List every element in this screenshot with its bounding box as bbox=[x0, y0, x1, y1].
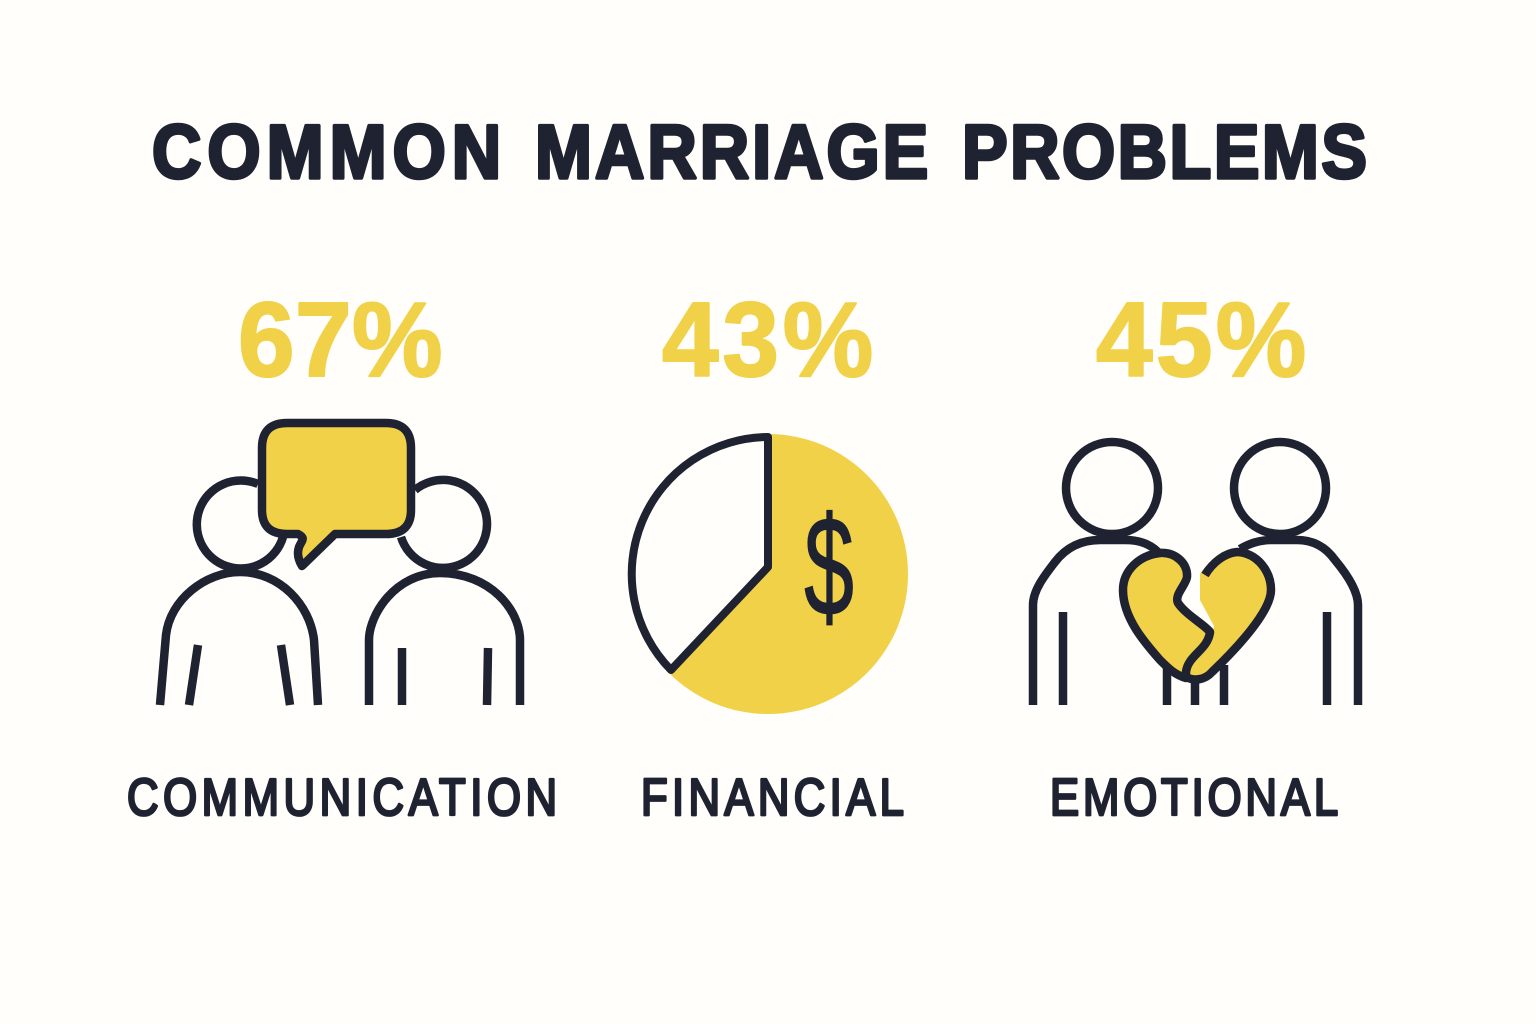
statistic: 43%: 43% bbox=[662, 281, 873, 399]
speech bubble bbox=[262, 423, 411, 566]
panel: financial bbox=[628, 281, 908, 827]
icon: two people with broken heart bbox=[1033, 442, 1358, 705]
person right bbox=[1224, 540, 1358, 705]
pie white slice bbox=[632, 437, 768, 670]
label: FINANCIAL bbox=[641, 770, 904, 827]
panel: communication bbox=[127, 281, 557, 827]
icon: two people talking bbox=[160, 423, 520, 705]
heart right fill bbox=[1185, 553, 1270, 678]
person right bbox=[369, 480, 520, 705]
person left bbox=[1033, 540, 1167, 705]
person left bbox=[160, 481, 318, 705]
pie filled share bbox=[628, 434, 908, 714]
statistic: 45%: 45% bbox=[1096, 281, 1306, 399]
title: MARRIAGE bbox=[535, 111, 928, 195]
dollar sign: $ bbox=[804, 488, 854, 646]
label: COMMUNICATION bbox=[127, 770, 557, 827]
title bbox=[152, 111, 1367, 195]
statistic: 67%: 67% bbox=[238, 281, 442, 399]
label: EMOTIONAL bbox=[1050, 770, 1338, 827]
title: COMMON bbox=[152, 111, 501, 195]
broken heart bbox=[1123, 552, 1271, 679]
heart right outline bbox=[1185, 552, 1271, 679]
heart left half bbox=[1123, 553, 1210, 678]
icon: pie chart with dollar bbox=[628, 434, 908, 714]
panel: emotional bbox=[1033, 281, 1358, 827]
center line bbox=[1191, 680, 1199, 705]
title: PROBLEMS bbox=[962, 111, 1367, 195]
